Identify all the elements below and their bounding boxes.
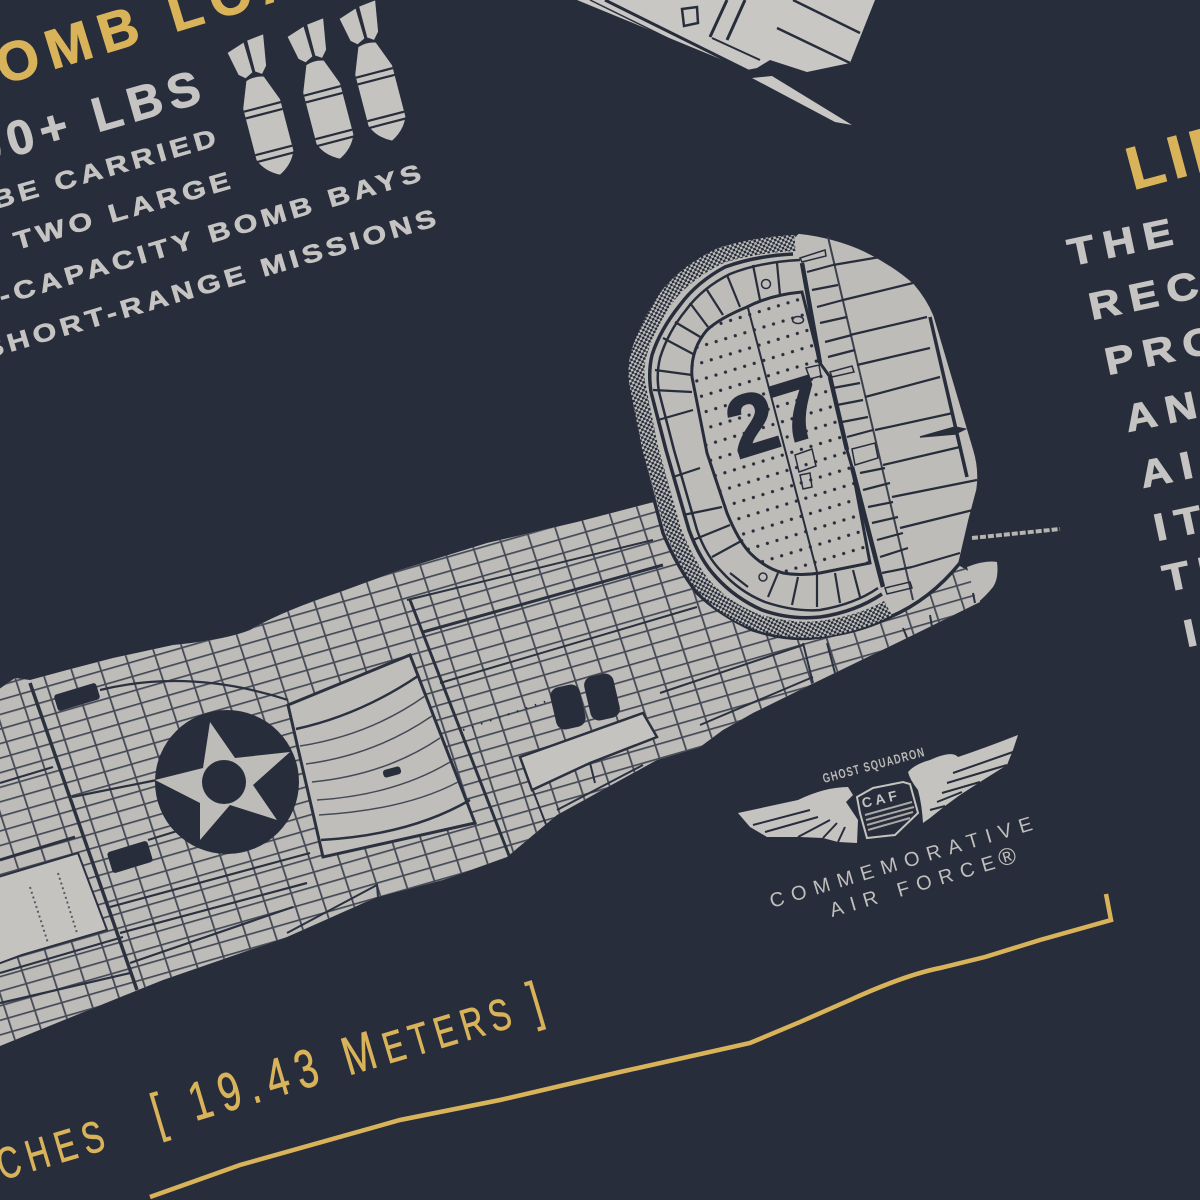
rudder lines xyxy=(833,257,977,567)
dimension label xyxy=(0,968,557,1200)
drawing: top view tail fragment xyxy=(577,0,875,125)
fuselage body xyxy=(0,470,980,1048)
two windows xyxy=(549,672,622,731)
ghost squadron: GHOST SQUADRON xyxy=(821,746,927,786)
commemorative: COMMEMORATIVE xyxy=(767,811,1043,913)
shield xyxy=(857,782,918,838)
text block: right description: THE xyxy=(1064,209,1185,274)
hinges and rivets xyxy=(759,250,965,594)
text block: bomb load description xyxy=(0,60,444,384)
right wing xyxy=(908,735,1018,823)
shield letters: CAF xyxy=(860,786,902,811)
air force: AIR FORCE® xyxy=(826,840,1027,923)
hatch lower xyxy=(107,840,153,874)
dimension line xyxy=(150,894,1111,1197)
ladder spar lines xyxy=(802,263,883,587)
text block: right description xyxy=(1064,209,1200,655)
national insignia: roundel and star xyxy=(155,710,299,854)
dimension label: [ 19.43 METERS ] xyxy=(144,968,557,1143)
lower wing root panel xyxy=(0,853,107,965)
icon: three bombs xyxy=(225,0,410,180)
rivet panel xyxy=(692,292,870,574)
lower rear panel xyxy=(520,713,657,790)
fuselage panel grid xyxy=(0,506,976,1040)
wing feathers xyxy=(753,752,1013,842)
checkered band xyxy=(636,243,888,630)
tail outer shape xyxy=(628,232,979,638)
drawing: tail fin tab and chain xyxy=(967,529,1060,603)
logo: Commemorative Air Force wings xyxy=(738,735,1043,923)
left wing xyxy=(738,787,858,843)
rivet row xyxy=(463,700,550,730)
drawing: fuselage side view xyxy=(0,502,980,1046)
wing root panel xyxy=(288,655,475,857)
ribs xyxy=(653,263,860,607)
hatch upper xyxy=(53,682,101,712)
slot xyxy=(382,766,402,778)
ring lines xyxy=(650,254,882,618)
tail number: 27 xyxy=(715,357,835,477)
drawing: twin tail disc with number 27 xyxy=(628,232,979,638)
